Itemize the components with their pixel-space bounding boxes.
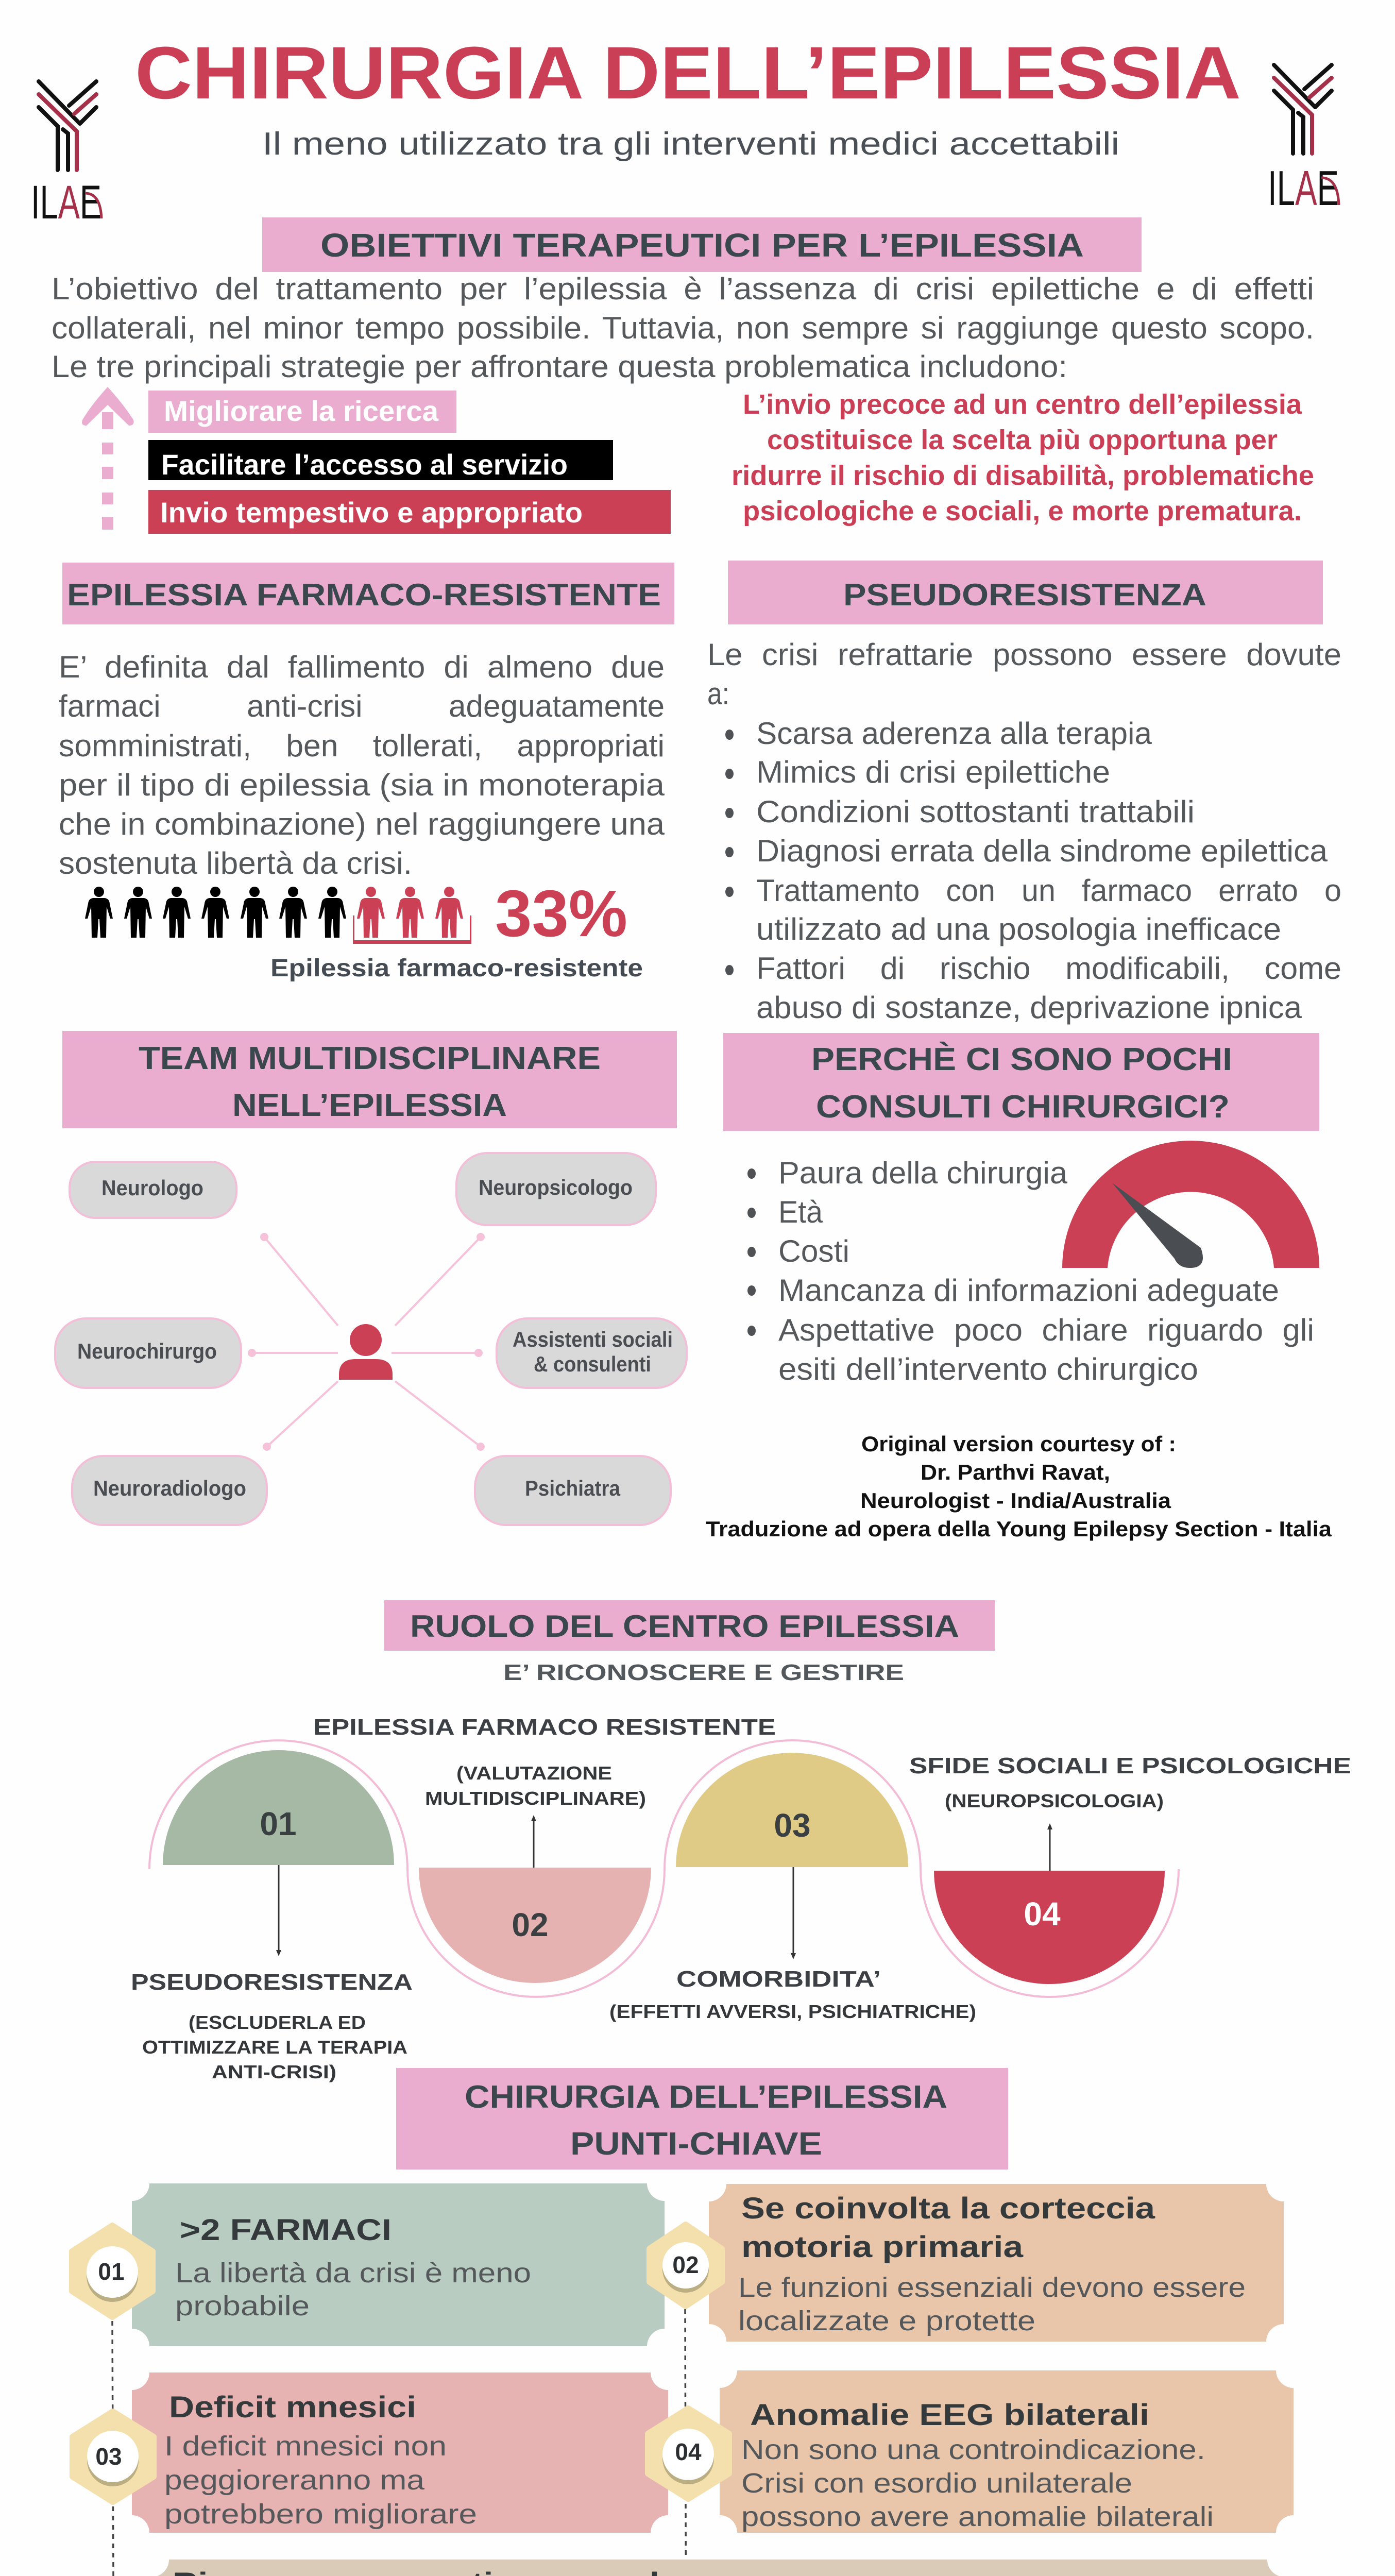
step 02 xyxy=(419,1868,651,1983)
card 03: peggioreranno ma xyxy=(164,2465,425,2496)
label: pseudoresistenza: OTTIMIZZARE LA TERAPIA xyxy=(142,2037,407,2058)
text block: definizione: sostenuta libertà da crisi. xyxy=(59,846,412,880)
text block: definizione xyxy=(59,650,665,880)
card 03 xyxy=(132,2372,668,2533)
heading: team multidisciplinare: TEAM MULTIDISCIPLINARE xyxy=(139,1041,601,1076)
heading: obiettivi terapeutici xyxy=(262,217,1142,272)
label: valutazione multidisciplinare: MULTIDISCIPLINARE) xyxy=(425,1788,646,1809)
pill: neurologo xyxy=(70,1162,236,1218)
pill: neuropsicologo xyxy=(456,1153,656,1225)
card 05 xyxy=(151,2560,1285,2576)
pill: psichiatra: Psichiatra xyxy=(525,1476,621,1500)
card 04 xyxy=(720,2370,1294,2533)
step 03 xyxy=(676,1753,908,1867)
chart: people pictogram 33% xyxy=(85,877,643,982)
card 01 xyxy=(132,2183,665,2346)
heading: punti-chiave: CHIRURGIA DELL’EPILESSIA xyxy=(465,2079,947,2115)
card 03: I deficit mnesici non xyxy=(164,2431,447,2462)
card 04: Crisi con esordio unilaterale xyxy=(741,2468,1132,2499)
credits: Original version courtesy of : xyxy=(861,1432,1176,1456)
title: CHIRURGIA DELL’EPILESSIA xyxy=(135,31,1241,114)
badge 01: 01 xyxy=(98,2258,125,2285)
text block: reasons list: Costi xyxy=(778,1234,849,1268)
card 04: possono avere anomalie bilaterali xyxy=(741,2501,1214,2532)
card 04: Non sono una controindicazione. xyxy=(741,2434,1205,2465)
text block: pseudoresistenza cause: Fattori di rischio modificabili, come xyxy=(756,951,1341,986)
text block: pseudoresistenza cause xyxy=(707,637,1341,1025)
text block: pseudoresistenza cause: Condizioni sottostanti trattabili xyxy=(756,794,1195,829)
credits: Neurologist - India/Australia xyxy=(860,1488,1171,1513)
label: sfide sociali: (NEUROPSICOLOGIA) xyxy=(945,1790,1164,1811)
badge 04: 04 xyxy=(675,2438,702,2465)
card 02: motoria primaria xyxy=(741,2230,1024,2264)
icon: gauge xyxy=(1062,1141,1319,1268)
step 02: 02 xyxy=(512,1906,549,1943)
chart: people pictogram 33%: 33% xyxy=(495,877,627,951)
heading: team multidisciplinare xyxy=(62,1031,677,1128)
pill: neurochirurgo xyxy=(55,1318,241,1388)
text block: reasons list: esiti dell’intervento chirurgico xyxy=(778,1352,1198,1386)
text block: pseudoresistenza cause: abuso di sostanze, deprivazione ipnica xyxy=(756,990,1302,1025)
label: valutazione multidisciplinare xyxy=(425,1762,646,1809)
text block: pseudoresistenza cause: Scarsa aderenza alla terapia xyxy=(756,716,1152,751)
pill: neurologo: Neurologo xyxy=(101,1176,203,1200)
heading: pseudoresistenza xyxy=(728,561,1323,624)
card 02: Se coinvolta la corteccia xyxy=(741,2192,1155,2225)
card 01: probabile xyxy=(175,2291,310,2321)
label: pseudoresistenza: (ESCLUDERLA ED xyxy=(189,2012,366,2033)
badge 03 xyxy=(73,2412,154,2502)
text block: reasons list: Età xyxy=(778,1195,823,1229)
label: valutazione multidisciplinare: (VALUTAZIONE xyxy=(456,1762,612,1784)
pill: assistenti sociali xyxy=(497,1318,687,1388)
text block: pseudoresistenza cause: Le crisi refrattarie possono essere dovute xyxy=(707,637,1341,672)
text block: reasons list: Mancanza di informazioni adeguate xyxy=(778,1273,1279,1308)
pill: assistenti sociali: Assistenti sociali xyxy=(513,1327,673,1351)
label: epilessia farmaco resistente: EPILESSIA FARMACO RESISTENTE xyxy=(313,1715,776,1740)
text block: objective intro: L’obiettivo del trattamento per l’epilessia è l’assenza di crisi epilettiche e di effetti xyxy=(52,272,1314,306)
text block: pseudoresistenza cause: Diagnosi errata della sindrome epilettica xyxy=(756,834,1328,868)
strategy bar: invio: Invio tempestivo e appropriato xyxy=(160,496,583,529)
step 04 xyxy=(934,1871,1165,1984)
text block: definizione: somministrati, ben tollerati, appropriati xyxy=(59,728,665,763)
arrow: dashed upward xyxy=(82,387,134,530)
heading: pseudoresistenza: PSEUDORESISTENZA xyxy=(843,578,1206,612)
heading: ruolo del centro: RUOLO DEL CENTRO EPILESSIA xyxy=(410,1609,959,1643)
step 03: 03 xyxy=(774,1807,811,1844)
label: pseudoresistenza xyxy=(131,1970,413,2082)
step 04: 04 xyxy=(1024,1895,1061,1933)
label: pseudoresistenza: PSEUDORESISTENZA xyxy=(131,1970,413,1995)
step 01: 01 xyxy=(260,1805,297,1842)
callout: invio precoce: psicologiche e sociali, e morte prematura. xyxy=(743,496,1302,527)
text block: reasons list xyxy=(747,1156,1314,1386)
subheading: riconoscere e gestire: E’ RICONOSCERE E GESTIRE xyxy=(503,1660,904,1685)
label: comorbidita: (EFFETTI AVVERSI, PSICHIATRICHE) xyxy=(609,2001,976,2022)
card 02: localizzate e protette xyxy=(738,2306,1035,2336)
heading: obiettivi terapeutici: OBIETTIVI TERAPEUTICI PER L’EPILESSIA xyxy=(320,227,1084,264)
subtitle: Il meno utilizzato tra gli interventi medici accettabili xyxy=(262,126,1119,162)
pill: neuroradiologo xyxy=(72,1456,267,1525)
text block: pseudoresistenza cause: Trattamento con un farmaco errato o xyxy=(756,873,1341,908)
callout: invio precoce: ridurre il rischio di disabilità, problematiche xyxy=(731,460,1314,491)
label: comorbidita: COMORBIDITA’ xyxy=(676,1967,881,1992)
credits: Traduzione ad opera della Young Epilepsy Section - Italia xyxy=(706,1517,1332,1541)
text block: reasons list: Aspettative poco chiare riguardo gli xyxy=(778,1313,1314,1347)
card 02: Le funzioni essenziali devono essere xyxy=(738,2272,1246,2303)
logo: ILAE left: ILAE xyxy=(31,176,101,229)
heading: pochi consulti: CONSULTI CHIRURGICI? xyxy=(816,1089,1230,1125)
heading: epilessia farmaco-resistente xyxy=(62,563,674,624)
logo: ILAE right xyxy=(1268,65,1339,216)
badge 02 xyxy=(650,2225,722,2306)
text block: objective intro: collaterali, nel minor tempo possibile. Tuttavia, non sempre si raggiunge questo scopo. xyxy=(52,311,1314,345)
pill: neuropsicologo: Neuropsicologo xyxy=(479,1175,633,1199)
badge 01 xyxy=(72,2226,152,2317)
card 03: potrebbero migliorare xyxy=(164,2499,477,2530)
chart: four-step wave xyxy=(131,1715,1351,2082)
strategy bar: ricerca xyxy=(148,391,456,433)
heading: team multidisciplinare: NELL’EPILESSIA xyxy=(232,1088,507,1123)
text block: objective intro: Le tre principali strategie per affrontare questa problematica includono: xyxy=(52,349,1067,384)
text block: definizione: che in combinazione) nel raggiungere una xyxy=(59,807,665,841)
heading: pochi consulti: PERCHÈ CI SONO POCHI xyxy=(811,1042,1232,1077)
pill: neurochirurgo: Neurochirurgo xyxy=(77,1339,217,1363)
pill: assistenti sociali: & consulenti xyxy=(534,1352,651,1376)
text block: pseudoresistenza cause: utilizzato ad una posologia inefficace xyxy=(756,912,1281,946)
logo: ILAE right: ILAE xyxy=(1268,161,1339,216)
text block: definizione: E’ definita dal fallimento di almeno due xyxy=(59,650,665,684)
logo: ILAE left xyxy=(31,81,101,229)
pill: psichiatra xyxy=(475,1456,671,1525)
card 03: Deficit mnesici xyxy=(169,2391,416,2424)
card 01: La libertà da crisi è meno xyxy=(175,2258,531,2289)
badge 03: 03 xyxy=(95,2443,122,2470)
diagram: team hub xyxy=(55,1153,687,1525)
text block: reasons list: Paura della chirurgia xyxy=(778,1156,1068,1190)
card 04: Anomalie EEG bilaterali xyxy=(750,2398,1149,2432)
label: comorbidita xyxy=(609,1967,976,2022)
step 01 xyxy=(163,1750,394,1865)
credits: Dr. Parthvi Ravat, xyxy=(921,1460,1110,1484)
label: sfide sociali xyxy=(909,1753,1351,1811)
text block: definizione: per il tipo di epilessia (sia in monoterapia xyxy=(59,768,665,802)
credits xyxy=(706,1432,1332,1541)
heading: pochi consulti xyxy=(723,1033,1319,1131)
callout: invio precoce xyxy=(731,389,1314,527)
text block: pseudoresistenza cause: a: xyxy=(707,676,729,711)
chart: people pictogram 33%: Epilessia farmaco-resistente xyxy=(270,955,643,982)
pill: neuroradiologo: Neuroradiologo xyxy=(93,1476,246,1500)
heading: ruolo del centro xyxy=(384,1600,995,1651)
text block: pseudoresistenza cause: Mimics di crisi epilettiche xyxy=(756,755,1110,789)
callout: invio precoce: L’invio precoce ad un centro dell’epilessia xyxy=(743,389,1302,420)
text block: definizione: farmaci anti-crisi adeguatamente xyxy=(59,689,665,723)
strategy bar: ricerca: Migliorare la ricerca xyxy=(164,395,439,427)
label: sfide sociali: SFIDE SOCIALI E PSICOLOGICHE xyxy=(909,1753,1351,1778)
icon: central person xyxy=(339,1324,393,1380)
heading: epilessia farmaco-resistente: EPILESSIA FARMACO-RESISTENTE xyxy=(67,578,661,612)
card 01: >2 FARMACI xyxy=(180,2213,392,2247)
label: pseudoresistenza: ANTI-CRISI) xyxy=(212,2061,336,2082)
badge 04 xyxy=(648,2409,729,2499)
heading: punti-chiave xyxy=(396,2068,1008,2170)
timeline dotted connectors xyxy=(112,2309,687,2576)
heading: punti-chiave: PUNTI-CHIAVE xyxy=(570,2126,822,2162)
card 02 xyxy=(709,2184,1284,2342)
callout: invio precoce: costituisce la scelta più opportuna per xyxy=(767,425,1278,455)
text block: objective intro xyxy=(52,272,1314,384)
badge 02: 02 xyxy=(672,2251,699,2278)
strategy bar: invio xyxy=(148,490,671,534)
strategy bar: accesso: Facilitare l’accesso al servizio xyxy=(161,448,568,481)
